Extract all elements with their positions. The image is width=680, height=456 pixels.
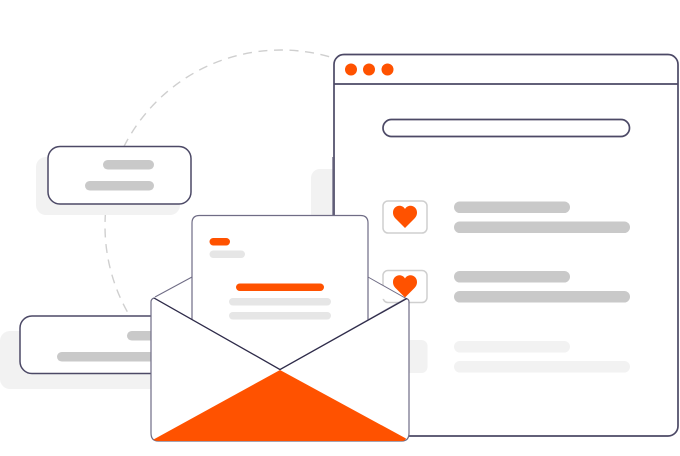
panel shadow behind browser window bbox=[311, 169, 371, 229]
dashed orbit circle bbox=[105, 50, 457, 402]
envelope back flap bbox=[153, 277, 407, 299]
card 2 bbox=[0, 316, 180, 389]
list row 1 bbox=[383, 201, 630, 233]
text lines bbox=[454, 271, 630, 302]
panel: browser window bbox=[334, 54, 678, 436]
window control dots bbox=[345, 64, 394, 76]
window edge shadow line bbox=[332, 157, 334, 216]
title bar divider bbox=[334, 83, 678, 85]
search bar bbox=[383, 120, 630, 136]
card 1 bbox=[36, 146, 191, 215]
text lines bbox=[454, 202, 630, 233]
letter bbox=[192, 216, 368, 372]
list row 3 bbox=[382, 340, 630, 373]
envelope back flap edges bbox=[155, 277, 407, 299]
envelope flap fold lines bbox=[154, 298, 407, 370]
envelope front bbox=[151, 298, 409, 441]
icon: heart 1 bbox=[383, 201, 427, 233]
icon: heart 2 bbox=[383, 270, 427, 302]
envelope bbox=[151, 216, 409, 441]
list row 2 bbox=[383, 270, 630, 302]
envelope orange triangle bbox=[154, 370, 406, 441]
